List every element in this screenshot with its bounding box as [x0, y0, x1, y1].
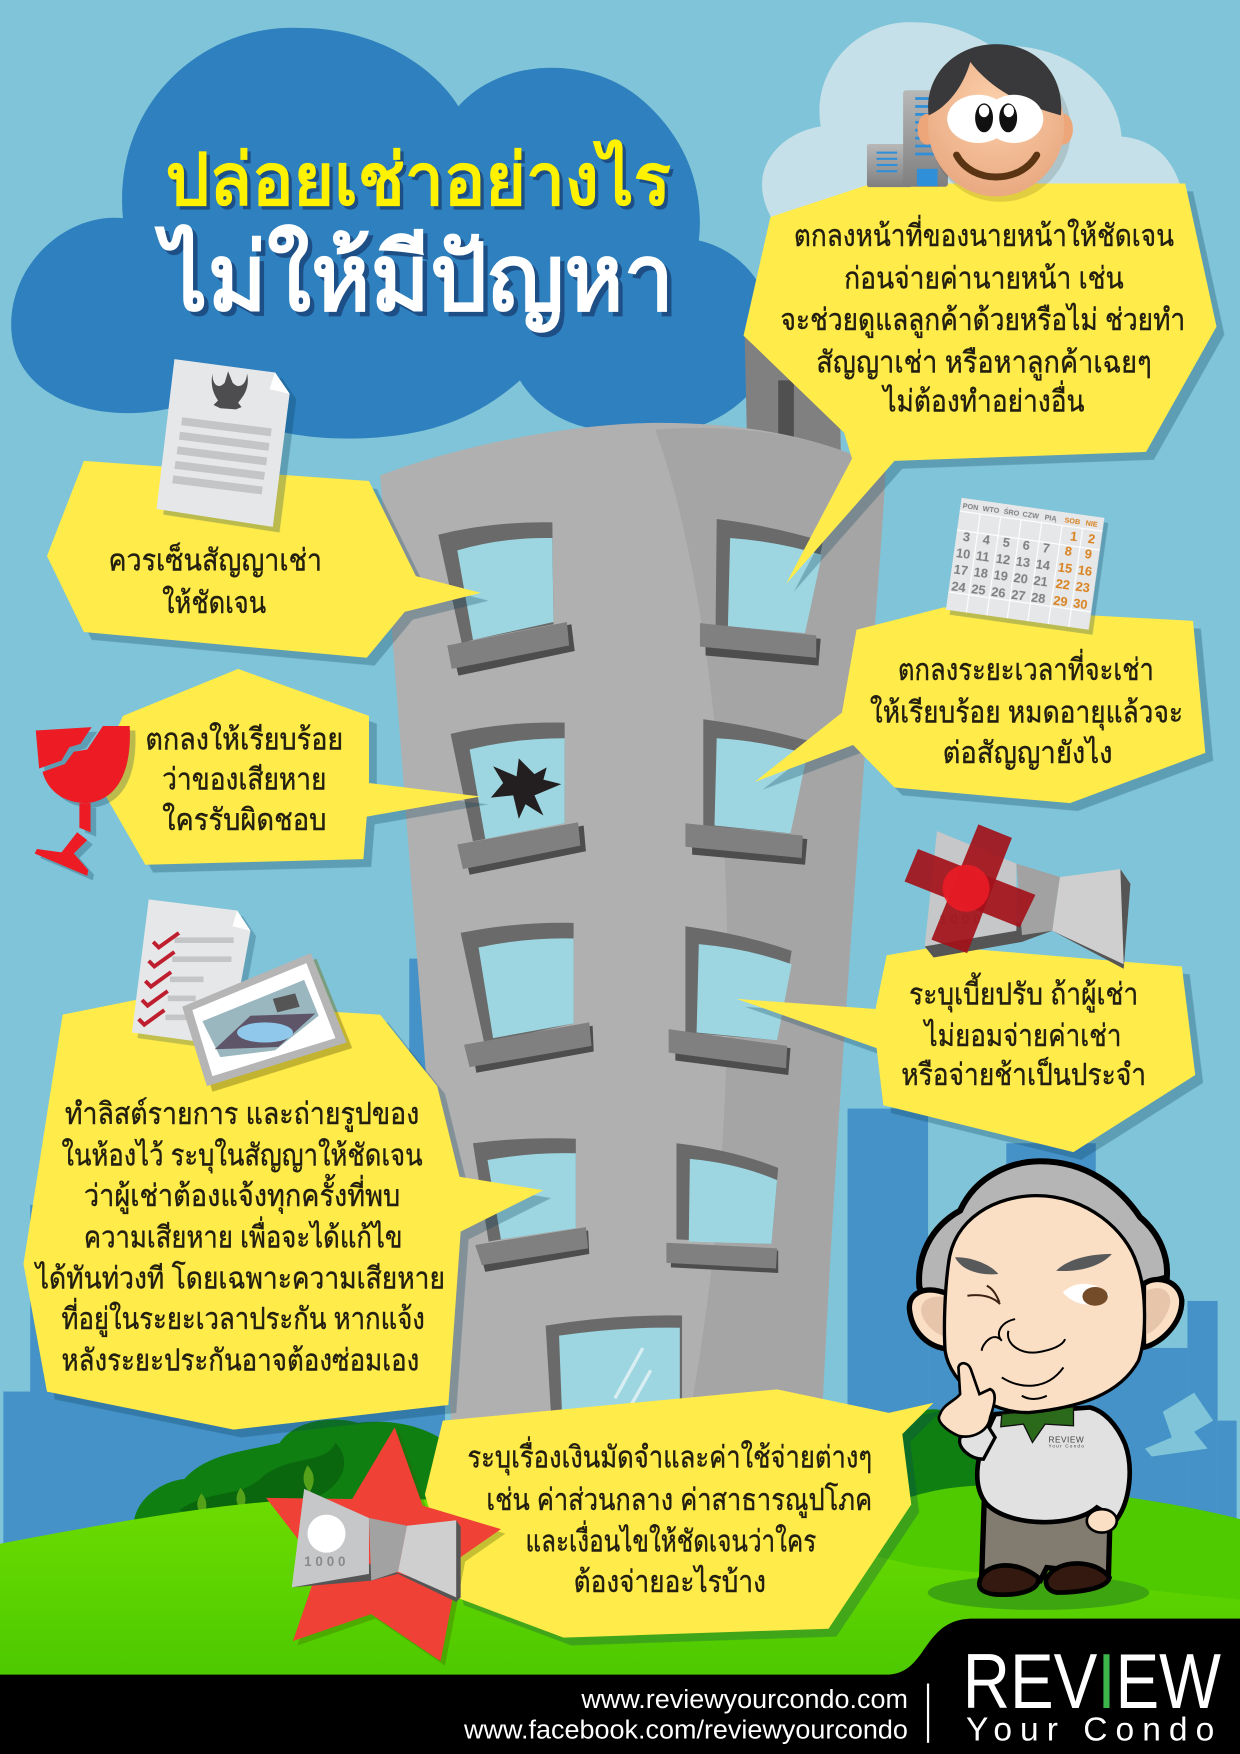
icon: red star with banknotes [266, 1427, 501, 1661]
callout: penalty fee: ไม่ยอมจ่ายค่าเช่า [923, 1018, 1121, 1053]
agent text: ก่อนจ่ายค่านายหน้า เช่น [844, 263, 1124, 296]
icon: calendar: PIĄ [1044, 513, 1058, 523]
callout: agent duties [744, 183, 1217, 584]
icon: calendar: NIE [1085, 518, 1098, 529]
pale cloud behind agent [762, 22, 1182, 257]
icon: calendar: 22 [1055, 576, 1071, 593]
icon: calendar: 20 [1013, 570, 1029, 587]
icon: calendar: 17 [953, 562, 969, 578]
icon: calendar: 1 [1069, 528, 1078, 544]
ears [909, 1279, 1182, 1349]
icon: banknotes with red cross [905, 824, 1130, 969]
eyes [947, 95, 1043, 143]
icon: red star with banknotes: 1000 [304, 1554, 346, 1569]
callout: penalty fee: ระบุเบี้ยปรับ ถ้าผู้เช่า [909, 973, 1138, 1014]
icon: checklist [132, 899, 250, 1046]
foreground hill [0, 1499, 1240, 1689]
grass hills [0, 1409, 1240, 1700]
callout: lease period [755, 607, 1205, 803]
icon: calendar: 12 [995, 551, 1011, 567]
window row 3 left [461, 923, 594, 1073]
icon: broken glass [35, 726, 130, 876]
icon: office buildings [867, 90, 948, 187]
hair [919, 1161, 1167, 1337]
icon: calendar: 29 [1052, 592, 1069, 609]
callout: damage responsibility: ตกลงให้เรียบร้อย [145, 721, 343, 756]
icon: calendar: 6 [1022, 537, 1031, 553]
icon: calendar: 4 [982, 532, 992, 548]
callout: sign the lease: ควรเซ็นสัญญาเช่า [108, 541, 322, 577]
icon: calendar: 14 [1035, 556, 1052, 573]
window row 2 left with broken glass [451, 723, 586, 875]
window row 1 right [700, 519, 823, 666]
agent text: สัญญาเช่า หรือหาลูกค้าเฉยๆ [816, 346, 1152, 381]
footer bar [0, 1619, 1240, 1754]
window row 4 left [473, 1138, 589, 1272]
tower shaded side [655, 428, 886, 1443]
face [928, 55, 1064, 196]
callout: damage responsibility [95, 669, 481, 865]
icon: calendar: 11 [975, 548, 991, 564]
title line 1 shadow: ปล่อยเช่าอย่างไร [169, 143, 674, 224]
callout: penalty fee [737, 946, 1195, 1152]
footer web address: www.reviewyourcondo.com [580, 1686, 908, 1714]
icon: calendar: 8 [1064, 543, 1073, 559]
open eye [1063, 1284, 1109, 1306]
nose and mouth [982, 1319, 1065, 1399]
winking eye [967, 1286, 1000, 1304]
window row 2 right [685, 719, 807, 865]
icon: calendar: 10 [955, 545, 971, 562]
icon: calendar: 15 [1057, 559, 1073, 576]
agent text: ไม่ต้องทำอย่างอื่น [882, 381, 1085, 419]
agent text: จะช่วยดูแลลูกค้าด้วยหรือไม่ ช่วยทำ [780, 302, 1185, 338]
ears [918, 114, 1073, 145]
icon: calendar: 5 [1002, 535, 1011, 550]
callout: inventory and photos: ว่าผู้เช่าต้องแจ้งทุกครั้งที่พบ [84, 1174, 400, 1215]
icon: calendar: 28 [1030, 589, 1046, 606]
window row 4 right [666, 1143, 778, 1273]
bush behind mascot [900, 1409, 984, 1499]
callout: lease period: ต่อสัญญายังไง [943, 735, 1113, 770]
icon: bullet hole [491, 758, 561, 819]
shirt logo: Your Condo [1048, 1443, 1084, 1448]
right hand [1087, 1509, 1117, 1533]
back hill [783, 1485, 1240, 1700]
footer facebook address: www.facebook.com/reviewyourcondo [463, 1716, 908, 1744]
ground shadow [928, 1575, 1149, 1610]
callout: sign the lease: ให้ชัดเจน [162, 585, 266, 620]
raised arm [960, 1424, 995, 1459]
pointing hand [939, 1363, 995, 1437]
icon: agent with office buildings [867, 44, 1073, 202]
inner ears [921, 1288, 1170, 1337]
entrance window [546, 1315, 682, 1454]
icon: calendar: 25 [970, 581, 987, 598]
icon: calendar: ŚRO [1003, 507, 1020, 518]
rear tower [745, 336, 841, 453]
icon: calendar [946, 498, 1104, 630]
callout: lease period: ตกลงระยะเวลาที่จะเช่า [898, 649, 1154, 687]
icon: calendar: 3 [962, 529, 971, 545]
sweater [977, 1407, 1130, 1522]
agent text: ตกลงหน้าที่ของนายหน้าให้ชัดเจน [794, 215, 1174, 253]
title line 2 shadow: ไม่ให้มีปัญหา [160, 229, 679, 336]
face [944, 1196, 1145, 1413]
callout: deposits and fees: ต้องจ่ายอะไรบ้าง [574, 1564, 766, 1599]
building [380, 336, 886, 1454]
agent text [780, 215, 1185, 419]
callout: inventory and photos: ที่อยู่ในระยะเวลาประกัน หากแจ้ง [61, 1298, 425, 1337]
tower body [380, 423, 886, 1443]
icon: calendar: 18 [973, 564, 989, 581]
callout: deposits and fees: ระบุเรื่องเงินมัดจำและค่าใช้จ่ายต่างๆ [467, 1437, 872, 1477]
icon: calendar: 30 [1072, 595, 1089, 612]
title [155, 140, 679, 336]
icon: calendar: 24 [950, 578, 968, 595]
callout: sign the lease [47, 461, 481, 658]
head shadow [930, 59, 1071, 202]
callout: inventory and photos: ทำลิสต์รายการ และถ่ายรูปของ [65, 1097, 419, 1132]
callout: deposits and fees [425, 1389, 934, 1638]
footer logo [927, 1637, 1221, 1749]
callout: inventory and photos: ในห้องไว้ ระบุในสัญญาให้ชัดเจน [61, 1138, 423, 1175]
callout: damage responsibility: ใครรับผิดชอบ [162, 802, 326, 837]
distant city skyline [3, 959, 1237, 1548]
callout: deposits and fees: และเงื่อนไขให้ชัดเจนว่าใคร [526, 1521, 816, 1559]
callout: inventory and photos: ความเสียหาย เพื่อจะได้แก้ไข [84, 1216, 403, 1254]
icon: calendar: PON [962, 501, 979, 512]
icon: calendar: 27 [1010, 587, 1027, 603]
character: old man mascot [909, 1161, 1182, 1610]
icon: calendar: 7 [1042, 540, 1051, 556]
icon: calendar: SOB [1064, 515, 1081, 527]
title line 1: ปล่อยเช่าอย่างไร [165, 140, 671, 221]
shoes [979, 1563, 1109, 1595]
icon: calendar: 23 [1075, 579, 1091, 596]
title line 2: ไม่ให้มีปัญหา [155, 225, 674, 332]
left bush [134, 1420, 458, 1544]
callout: damage responsibility: ว่าของเสียหาย [162, 764, 326, 797]
hair [928, 44, 1061, 115]
callout: inventory and photos [23, 1000, 543, 1430]
icon: calendar: 13 [1015, 553, 1031, 570]
footer logo: Your Condo [966, 1712, 1214, 1749]
icon: contract document [157, 359, 290, 527]
icon: room photo [182, 953, 347, 1086]
callout: lease period: ให้เรียบร้อย หมดอายุแล้วจะ [870, 695, 1183, 732]
window row 3 right [669, 926, 792, 1075]
window row 1 left [438, 522, 575, 676]
callout: penalty fee: หรือจ่ายช้าเป็นประจำ [901, 1056, 1146, 1092]
icon: calendar: 16 [1077, 562, 1093, 579]
footer logo: REVIEW [963, 1637, 1221, 1725]
icon: calendar: 21 [1033, 573, 1049, 590]
icon: calendar: 19 [993, 567, 1009, 584]
callout: deposits and fees: เช่น ค่าส่วนกลาง ค่าสาธารณูปโภค [486, 1482, 872, 1518]
shirt logo: REVIEW [1048, 1434, 1084, 1444]
trousers [982, 1504, 1110, 1581]
title cloud [11, 28, 774, 439]
icon: calendar: 2 [1087, 531, 1096, 547]
icon: banknotes with red cross: 1000 [939, 912, 981, 927]
icon: calendar: 9 [1084, 546, 1093, 562]
icon: calendar: CZW [1022, 510, 1040, 521]
collar [1001, 1407, 1073, 1442]
callout: inventory and photos: ได้ทันท่วงที โดยเฉพาะความเสียหาย [34, 1261, 445, 1296]
icon: calendar: WTO [982, 504, 1000, 515]
smile [957, 155, 1037, 177]
icon: calendar: 26 [990, 584, 1007, 601]
eyebrows [955, 1254, 1112, 1274]
callout: inventory and photos: หลังระยะประกันอาจต้องซ่อมเอง [61, 1344, 419, 1377]
